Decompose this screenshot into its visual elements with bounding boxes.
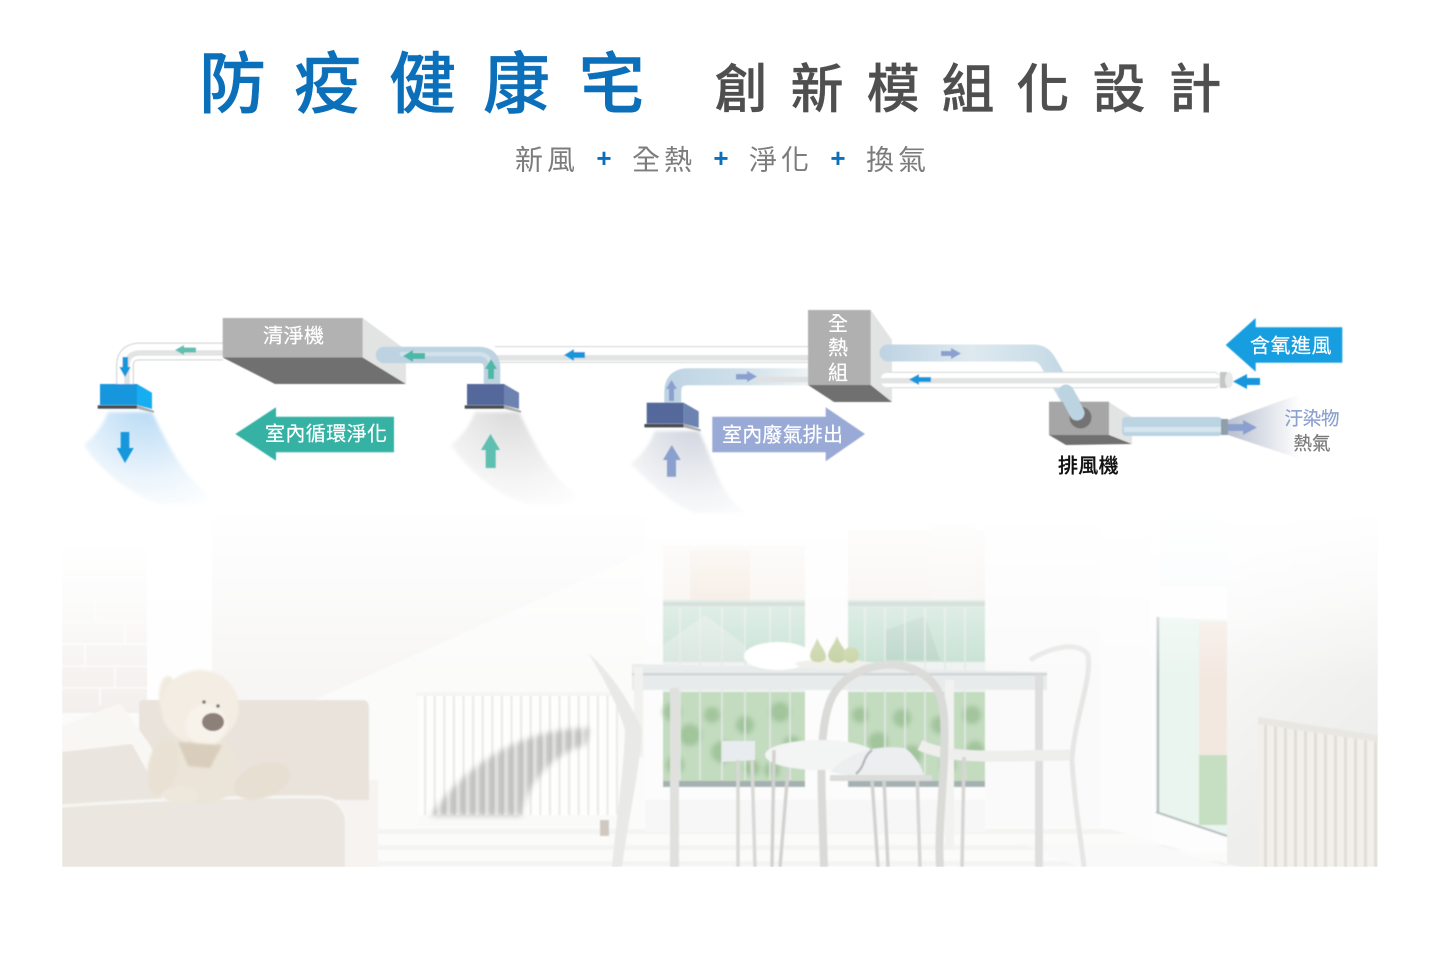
big arrow: indoor circulation [235,407,394,461]
interior wall [62,513,1378,867]
bear nose [202,713,224,731]
bear eyes [202,700,220,708]
cleaner unit box [223,318,406,384]
duct: fresh air intake [881,372,1233,388]
photo: dining room interior [62,550,1378,867]
label: cleaner: 清淨機 [263,324,324,348]
subtitle: 新風 + 全熱 + 淨化 + 換氣: +++ [596,143,846,173]
front chair [765,665,944,867]
brick wall [62,662,146,713]
label: hot air: 熱氣 [1294,433,1331,454]
fan inlet ring [1070,406,1092,428]
pears and plate [744,636,869,670]
wall between windows [984,746,987,750]
big arrow: fresh air [1226,318,1342,372]
subtitle: 新風 + 全熱 + 淨化 + 換氣: 新風全熱淨化換氣 [515,144,926,176]
table top and legs [632,664,1047,867]
airflow cone: blue supply [84,412,232,504]
duct: long return line [495,346,810,363]
heat exchanger box [808,310,892,402]
top fade to white [212,514,1377,662]
right door window [1156,616,1228,838]
label: heat exchanger: 組 [828,362,848,384]
label: oxygen intake: 含氧進風 [1250,334,1332,358]
ceiling unit: exhaust intake [644,403,701,431]
sofa [62,700,378,867]
exhaust fan box [1049,392,1132,445]
label: exhaust fan: 排風機 [1058,454,1119,478]
label: indoor exhaust: 室內廢氣排出 [722,424,843,446]
title: main heading [199,48,1222,122]
diagram: air duct system [84,310,1342,513]
window trees [663,702,984,778]
small flow arrows: exhaust [663,348,1257,477]
airflow cone: exhaust intake [631,431,752,513]
duct: heat exchanger to exhaust fan [888,353,1080,418]
label: heat exchanger [828,314,848,384]
small flow arrows: blue supply [117,349,1260,463]
ceiling unit: blue supply [98,384,154,413]
ceiling unit: return [465,384,521,413]
heading: 防疫健康宅: 防疫健康宅 [199,48,645,122]
heading: 創新模組化設計: 創新模組化設計 [714,60,1222,120]
small flow arrows: circulation [175,345,500,468]
big arrow: indoor exhaust [712,407,865,461]
duct: return unit to cleaner [384,355,492,385]
label: heat exchanger: 全 [828,314,848,336]
radiator right [1258,717,1378,867]
radiator left [416,692,620,836]
left chair [588,653,755,867]
label: heat exchanger: 熱 [828,336,848,360]
teddy bear [146,670,288,802]
label: pollutants: 汙染物 [1284,408,1340,429]
label: indoor circulation purification: 室內循環淨化 [265,422,387,446]
duct: supply to blue unit [125,352,223,385]
floor [1101,830,1234,866]
airflow cone: grey return [451,412,599,504]
window view: city and rooftops [660,550,986,788]
wall column [147,513,212,743]
duct: fan outlet [1122,393,1303,460]
back right chair [917,647,1089,867]
duct: blue unit 3 to heat exchanger [673,377,810,403]
sunlit wall diagonal [212,513,645,700]
airflow cones [84,412,752,513]
right wall [1227,650,1378,867]
